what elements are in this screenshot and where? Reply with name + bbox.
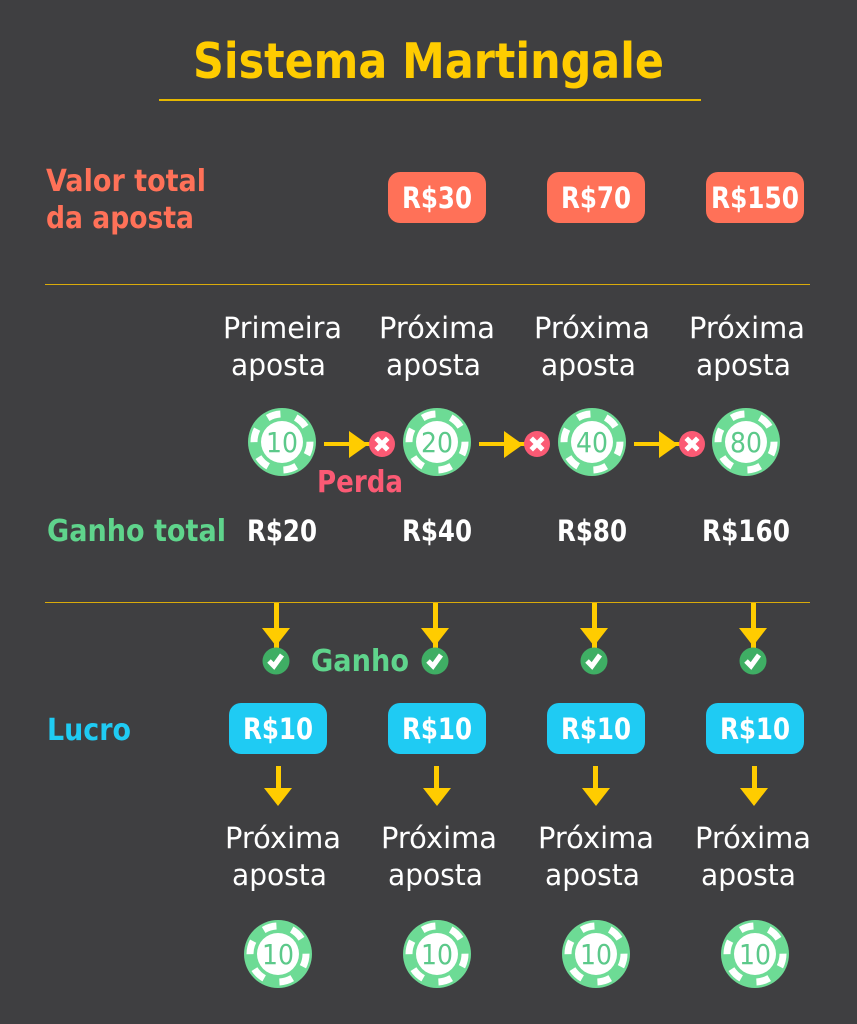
label: primeira aposta: Primeira <box>223 311 342 345</box>
badge: lucro 2: R$10 <box>402 712 472 746</box>
arrow and loss mark 1 <box>324 431 395 458</box>
label: proxima aposta 4 <box>225 821 341 892</box>
label: primeira aposta: aposta <box>231 348 326 382</box>
badge: lucro 4 <box>706 703 804 754</box>
chip: 20: 20 <box>421 426 453 459</box>
chip: 10 <box>244 404 320 480</box>
label: primeira aposta <box>223 311 342 382</box>
badge: R$70: R$70 <box>561 181 631 215</box>
arrow down 4 <box>740 766 768 806</box>
badge: lucro 1 <box>229 703 327 754</box>
label: proxima aposta 3: Próxima <box>689 311 805 345</box>
label: proxima aposta 1 <box>379 311 495 382</box>
label: proxima aposta 5: Próxima <box>381 821 497 855</box>
label: proxima aposta 4: aposta <box>232 858 327 892</box>
chip: 40 <box>554 404 630 480</box>
label: proxima aposta 1: Próxima <box>379 311 495 345</box>
label: proxima aposta 6: Próxima <box>538 821 654 855</box>
title: Sistema Martingale <box>193 33 664 90</box>
badge: lucro 2 <box>388 703 486 754</box>
chip: bottom 2: 10 <box>421 938 453 971</box>
arrow and win mark 4 <box>739 603 767 674</box>
label: proxima aposta 3: aposta <box>696 348 791 382</box>
value: R$160: R$160 <box>702 514 790 548</box>
chip: 80 <box>708 404 784 480</box>
chip: bottom 3: 10 <box>580 938 612 971</box>
badge: R$30: R$30 <box>402 181 472 215</box>
label: proxima aposta 7 <box>695 821 811 892</box>
label: proxima aposta 4: Próxima <box>225 821 341 855</box>
heading: valor total da aposta: da aposta <box>46 201 194 236</box>
chip: 10: 10 <box>266 426 298 459</box>
label: proxima aposta 2: aposta <box>541 348 636 382</box>
arrow and win mark 2 <box>421 603 449 674</box>
label: perda: Perda <box>317 465 403 500</box>
arrow down 2 <box>423 766 451 806</box>
chip: bottom 1: 10 <box>262 938 294 971</box>
badge: R$150 <box>706 172 804 223</box>
badge: lucro 3 <box>547 703 645 754</box>
chip: bottom 4: 10 <box>739 938 771 971</box>
label: proxima aposta 7: Próxima <box>695 821 811 855</box>
chip: 80: 80 <box>730 426 762 459</box>
value: R$40: R$40 <box>402 514 472 548</box>
arrow down 1 <box>264 766 292 806</box>
badge: R$30 <box>388 172 486 223</box>
arrow and loss mark 3 <box>634 431 705 458</box>
label: ganho: Ganho <box>311 644 409 679</box>
chip: 20 <box>399 404 475 480</box>
arrow and loss mark 2 <box>479 431 550 458</box>
badge: lucro 1: R$10 <box>243 712 313 746</box>
chip: bottom 4 <box>717 916 793 992</box>
label: proxima aposta 6 <box>538 821 654 892</box>
label: proxima aposta 2: Próxima <box>534 311 650 345</box>
heading: ganho total: Ganho total <box>47 514 226 549</box>
arrow down 3 <box>582 766 610 806</box>
label: proxima aposta 3 <box>689 311 805 382</box>
heading: lucro: Lucro <box>47 713 131 748</box>
badge: R$70 <box>547 172 645 223</box>
label: proxima aposta 1: aposta <box>386 348 481 382</box>
value: R$80: R$80 <box>557 514 627 548</box>
label: proxima aposta 2 <box>534 311 650 382</box>
badge: R$150: R$150 <box>711 181 799 215</box>
label: proxima aposta 6: aposta <box>545 858 640 892</box>
heading: valor total da aposta: Valor total <box>46 164 206 199</box>
label: proxima aposta 7: aposta <box>701 858 796 892</box>
arrow and win mark 1 <box>262 603 290 674</box>
chip: 40: 40 <box>576 426 608 459</box>
badge: lucro 3: R$10 <box>561 712 631 746</box>
label: proxima aposta 5 <box>381 821 497 892</box>
chip: bottom 3 <box>558 916 634 992</box>
label: proxima aposta 5: aposta <box>388 858 483 892</box>
arrow and win mark 3 <box>580 603 608 674</box>
chip: bottom 2 <box>399 916 475 992</box>
value: R$20: R$20 <box>247 514 317 548</box>
chip: bottom 1 <box>240 916 316 992</box>
badge: lucro 4: R$10 <box>720 712 790 746</box>
heading: valor total da aposta <box>46 164 206 236</box>
